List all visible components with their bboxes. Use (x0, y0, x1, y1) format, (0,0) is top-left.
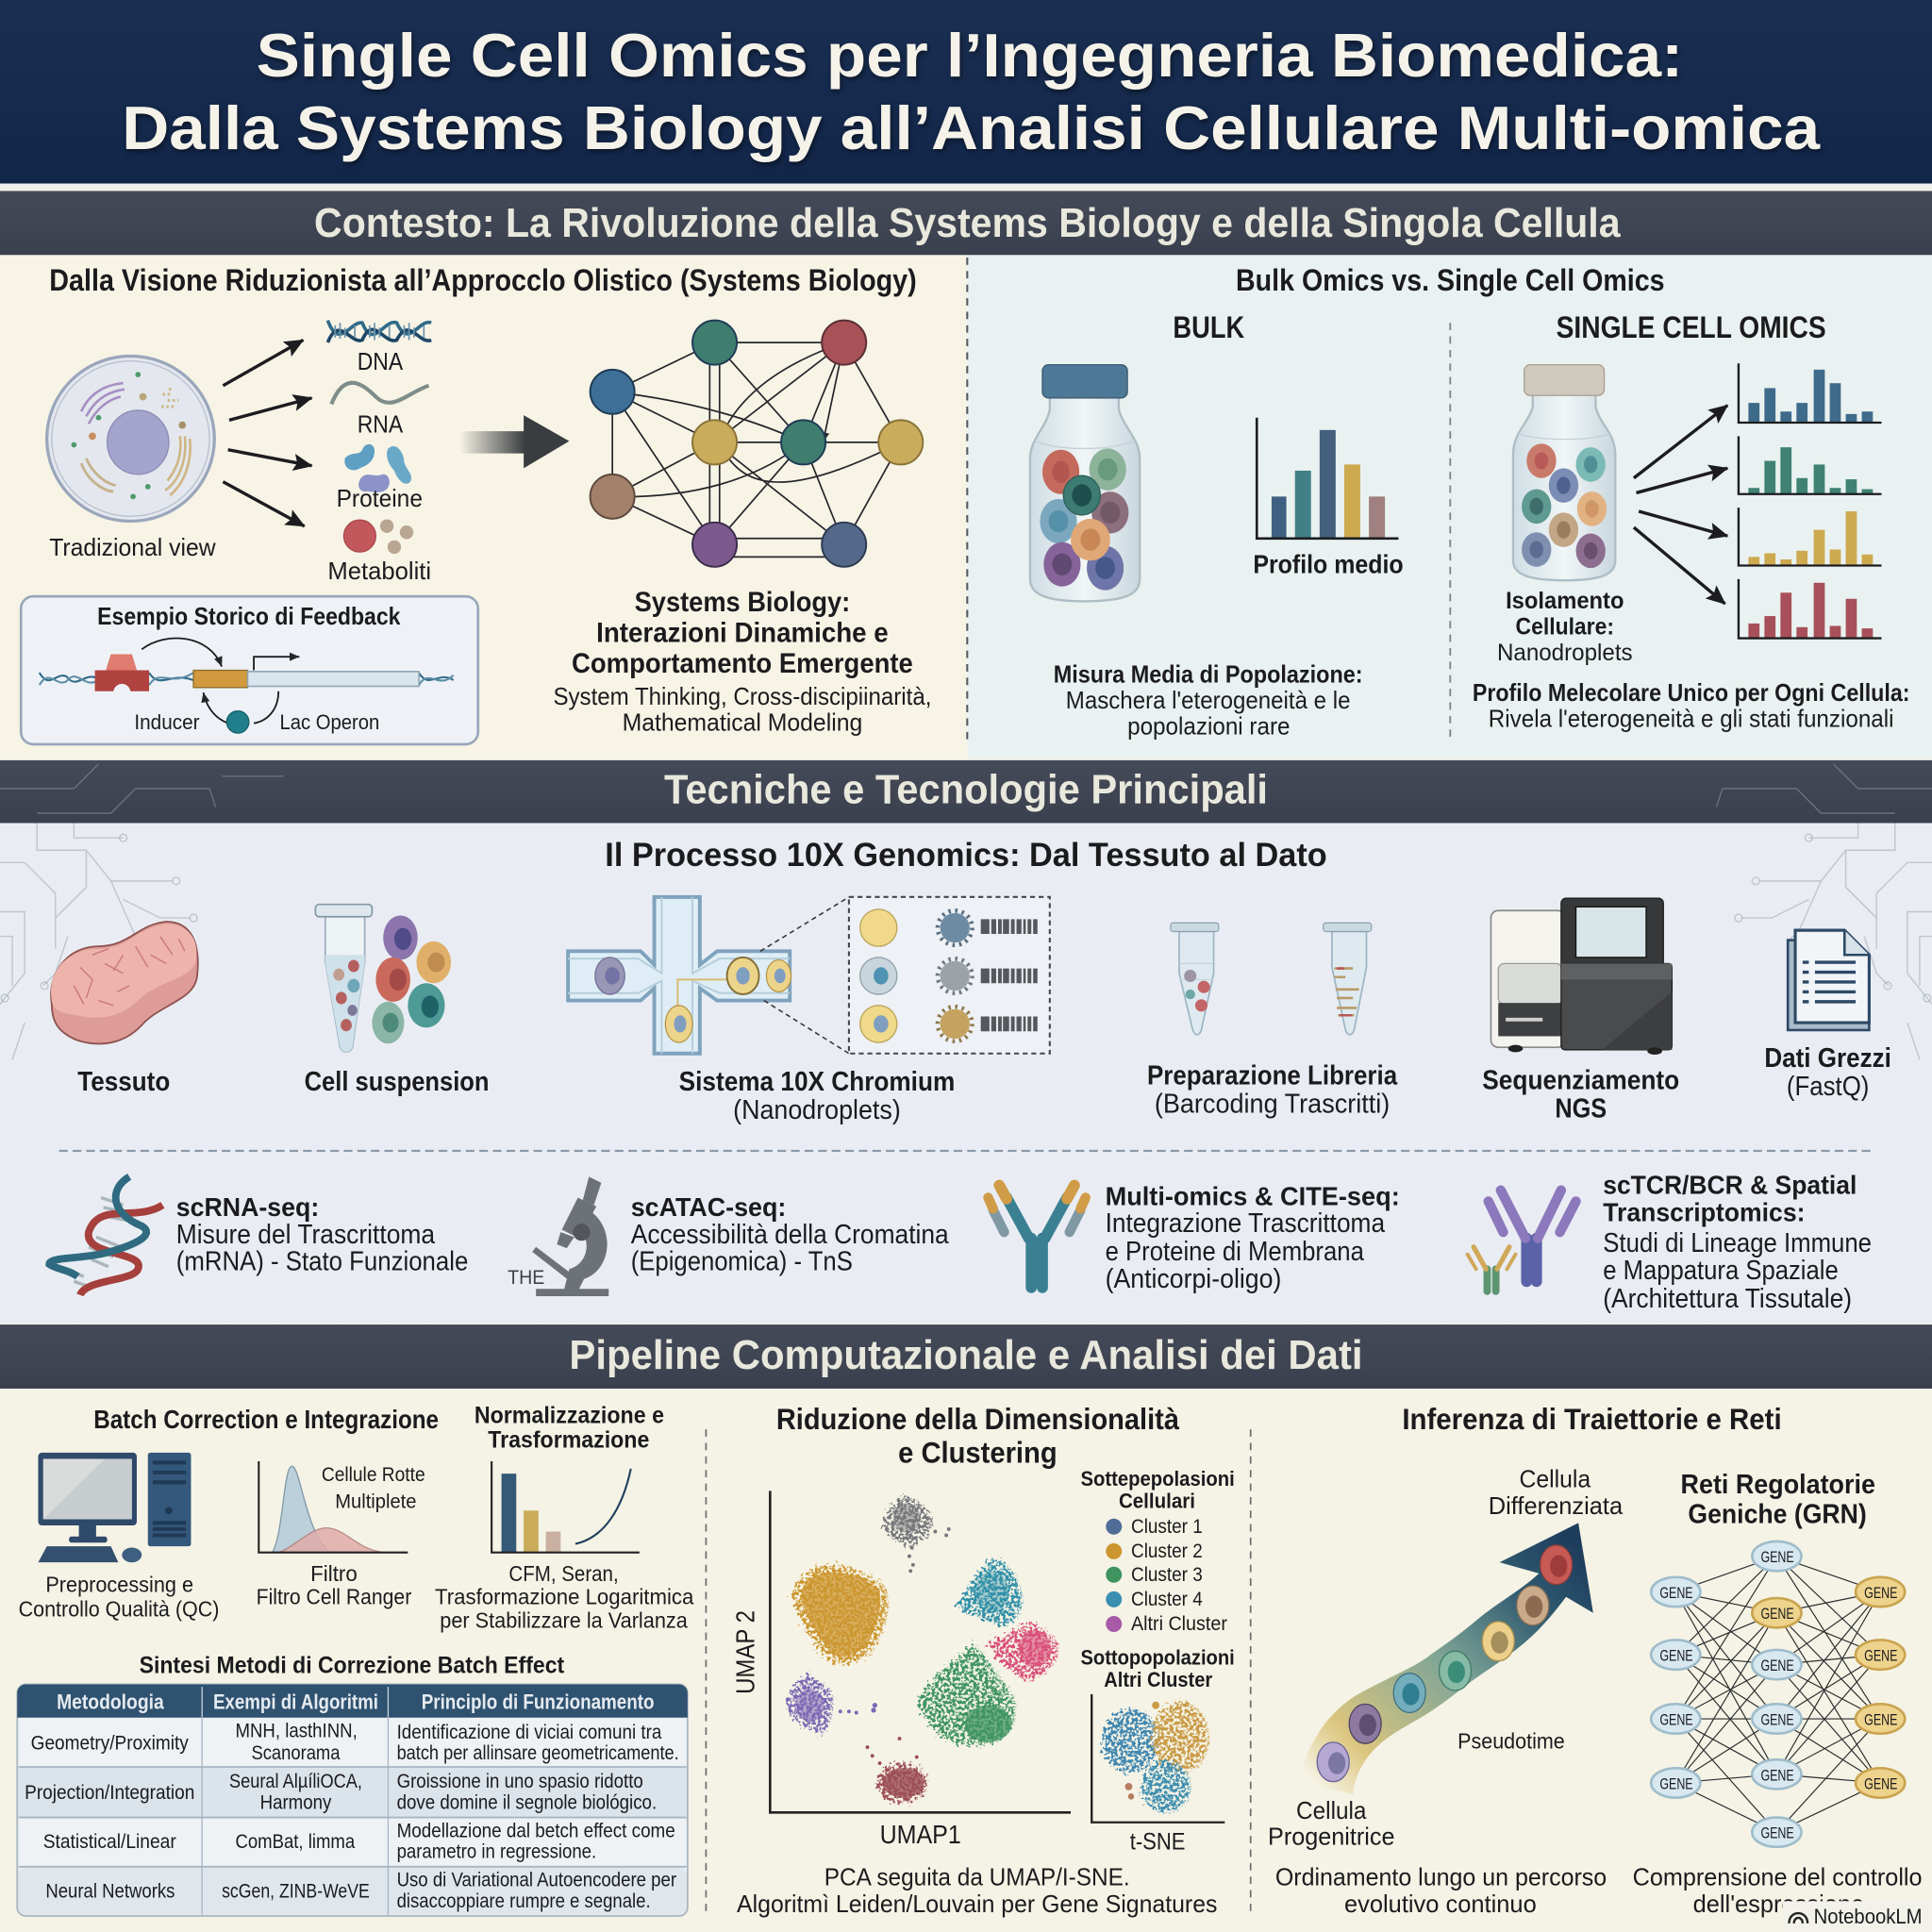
text block: systems biology: Interazioni Dinamiche e (596, 617, 889, 648)
text block: scatac-seq: Accessibilità della Cromatina (631, 1220, 949, 1250)
text block: normalization methods (435, 1561, 694, 1632)
section band: pipeline: Pipeline Computazionale e Analisi dei Dati (569, 1333, 1363, 1378)
text block: preprocessing: Preprocessing e (45, 1573, 193, 1597)
heading: processo 10x: Il Processo 10X Genomics: Dal Tessuto al Dato (605, 837, 1327, 874)
icon: antibody citeseq (989, 1185, 1086, 1288)
axis label: umap 2: UMAP 2 (730, 1610, 759, 1694)
arrows: cell to molecular layers (223, 340, 311, 526)
cluster: green (918, 1643, 1017, 1745)
text block: profilo molecolare (1473, 678, 1909, 733)
subheading: bulk: BULK (1173, 309, 1245, 344)
label: sistema 10x chromium: Sistema 10X Chromium (679, 1067, 955, 1097)
label: cellula differenziata: Cellula (1519, 1464, 1591, 1492)
text block: normalization methods: per Stabilizzare la Varlanza (440, 1607, 689, 1632)
bar chart: profile 3 (1739, 508, 1881, 566)
label: tradizional view: Tradizional view (49, 533, 216, 561)
row: neural networks (45, 1870, 676, 1912)
icon: proteine (344, 444, 411, 492)
legend: sottopopolazioni cellulari: Cluster 4 (1131, 1589, 1203, 1610)
caption: comprensione controllo: Comprensione del controllo (1633, 1862, 1923, 1890)
panel: 10x genomics process (0, 823, 1932, 1324)
text block: filtro: Filtro (310, 1561, 358, 1586)
caption: pca umap (737, 1862, 1217, 1918)
icon: dna helix (49, 1176, 162, 1295)
icon: microscope (508, 1176, 608, 1296)
table rows (17, 1684, 688, 1916)
header banner with title: Dalla Systems Biology all’Analisi Cellulare Multi-omica (122, 93, 1821, 162)
bar chart: profile 4 (1739, 579, 1881, 639)
chart: qc filter distribution: Multiplete (335, 1491, 416, 1513)
arrows: jar to profiles (1634, 406, 1727, 604)
section band: contesto (0, 191, 1932, 255)
label: inducer: Inducer (134, 710, 200, 734)
label: profilo medio: Profilo medio (1253, 549, 1404, 578)
text block: misura media (1054, 660, 1363, 740)
text block: sctcr spatial: e Mappatura Spaziale (1603, 1256, 1839, 1286)
diagram: lac operon (40, 639, 454, 733)
heading: sottopopolazioni altri cluster: Altri Cluster (1104, 1668, 1213, 1691)
text block: systems biology: Comportamento Emergente (572, 648, 913, 679)
icon: dna (327, 321, 431, 342)
text block: isolamento: Nanodroplets (1497, 641, 1633, 666)
caption: comprensione controllo (1633, 1862, 1923, 1918)
label: cellula progenitrice: Progenitrice (1268, 1822, 1395, 1850)
heading: sintesi metodi: Sintesi Metodi di Correzione Batch Effect (140, 1654, 564, 1679)
section band: tecniche (0, 760, 1932, 823)
axis label: t-sne: t-SNE (1130, 1829, 1185, 1855)
text block: scatac-seq (631, 1192, 949, 1277)
heading: riduzione dimensionalita: Riduzione della Dimensionalità (776, 1403, 1179, 1436)
network: gene regulatory network: GENE (1864, 1647, 1897, 1665)
bar chart: profile 2 (1739, 436, 1881, 494)
header banner with title: Single Cell Omics per l’Ingegneria Biomedica: (257, 21, 1683, 90)
network: gene regulatory network: GENE (1659, 1711, 1693, 1729)
text block: multi-omics: e Proteine di Membrana (1106, 1237, 1364, 1267)
network: gene regulatory network: GENE (1864, 1584, 1897, 1602)
row: geometry proximity: batch per allinsare geometricamente. (397, 1742, 679, 1764)
label: cellula progenitrice: Cellula (1296, 1796, 1367, 1824)
table header (17, 1684, 688, 1718)
text block: sctcr spatial: Transcriptomics: (1603, 1197, 1805, 1226)
label: cell suspension: Cell suspension (305, 1067, 490, 1097)
axis label: umap 1: UMAP1 (880, 1820, 961, 1849)
label: pseudotime: Pseudotime (1457, 1728, 1565, 1753)
network diagram: systems biology (591, 321, 923, 567)
heading: normalizzazione: Normalizzazione e (475, 1404, 664, 1429)
row: geometry proximity: Scanorama (251, 1742, 341, 1764)
text block: normalization methods: CFM, Seran, (508, 1561, 619, 1586)
subheading: single cell omics: SINGLE CELL OMICS (1557, 309, 1826, 344)
network: gene regulatory network: GENE (1864, 1774, 1897, 1792)
panel: preprocessing and batch correction (0, 1389, 1932, 1932)
arrow: pseudotime trajectory (1299, 1523, 1593, 1794)
text block: filtro (257, 1561, 411, 1609)
text block: systems biology: Systems Biology: (635, 587, 850, 618)
label: preparazione libreria (1147, 1060, 1398, 1119)
text block: preprocessing (19, 1573, 219, 1622)
label: dna: DNA (358, 347, 404, 375)
text block: scrna-seq: scRNA-seq: (176, 1192, 319, 1222)
label: sequenziamento ngs: NGS (1555, 1094, 1607, 1124)
text block: sctcr spatial: Studi di Lineage Immune (1603, 1228, 1872, 1258)
text block: multi-omics (1106, 1181, 1400, 1294)
icon: sequencer (1491, 898, 1672, 1055)
row: projection integration: Harmony (260, 1791, 332, 1813)
chart: t-sne scatter (1091, 1694, 1224, 1823)
network: gene regulatory network: GENE (1659, 1774, 1693, 1792)
section band: contesto: Contesto: La Rivoluzione della Systems Biology e della Singola Cellula (314, 201, 1622, 246)
bar chart: profile 1 (1739, 363, 1881, 423)
label: tessuto: Tessuto (77, 1067, 170, 1097)
diagram: 10x chromium microfluidics (568, 897, 791, 1054)
icon: computer (38, 1453, 191, 1562)
cluster: gray (883, 1496, 951, 1573)
cluster: maroon (866, 1737, 929, 1803)
icon: traditional cell (47, 356, 214, 521)
label: preparazione libreria: Preparazione Libreria (1147, 1060, 1398, 1091)
label: cellula differenziata (1489, 1464, 1624, 1520)
network: gene regulatory network: GENE (1864, 1711, 1897, 1729)
label: dati grezzi (1764, 1043, 1891, 1102)
network: gene regulatory network: GENE (1760, 1766, 1794, 1784)
heading: batch correction: Batch Correction e Integrazione (93, 1405, 439, 1434)
header banner with title (0, 0, 1932, 189)
heading: riduzione dimensionalita: e Clustering (898, 1436, 1058, 1469)
chart: qc filter distribution (258, 1461, 425, 1553)
legend: sottopopolazioni cellulari: Cluster 1 (1131, 1516, 1203, 1538)
row: neural networks: scGen, ZINB-WeVE (222, 1880, 370, 1902)
heading: normalizzazione (475, 1404, 664, 1454)
network: gene regulatory network: GENE (1760, 1824, 1794, 1842)
label: cellula progenitrice (1268, 1796, 1395, 1850)
text block: misura media: Misura Media di Popolazione: (1054, 660, 1363, 689)
callout heading: Esempio Storico di Feedback (97, 602, 401, 630)
label: proteine: Proteine (337, 484, 423, 512)
chart: umap scatter (770, 1491, 1071, 1812)
cluster: teal (957, 1558, 1024, 1625)
heading: bulk vs single cell: Bulk Omics vs. Single Cell Omics (1236, 262, 1665, 297)
text block: filtro: Filtro Cell Ranger (257, 1585, 411, 1609)
row: projection integration: dove domine il segnole biológico. (397, 1791, 657, 1813)
chart: normalization (491, 1461, 640, 1553)
table header: Principlo di Funzionamento (422, 1690, 655, 1714)
text block: isolamento: Isolamento (1506, 589, 1624, 614)
text block: isolamento: Cellulare: (1516, 615, 1614, 641)
text block: profilo molecolare: Rivela l'eterogeneità e gli stati funzionali (1489, 705, 1894, 733)
icon: rna (331, 383, 429, 404)
network: gene regulatory network: GENE (1760, 1548, 1794, 1566)
text block: misura media: popolazioni rare (1127, 711, 1291, 740)
panel: riduzionista vs olistico (0, 255, 967, 759)
label: sequenziamento ngs: Sequenziamento (1482, 1066, 1679, 1096)
section band: pipeline (0, 1324, 1932, 1389)
heading: reti regolatorie geniche: Reti Regolatorie (1681, 1470, 1875, 1500)
text block: multi-omics: Multi-omics & CITE-seq: (1106, 1181, 1400, 1210)
text block: sctcr spatial: (Architettura Tissutale) (1603, 1284, 1852, 1314)
heading: inferenza traiettorie: Inferenza di Traiettorie e Reti (1402, 1403, 1782, 1436)
legend: sottopopolazioni cellulari: Altri Cluster (1131, 1613, 1227, 1635)
row: neural networks: Uso di Variational Autoencodere per (397, 1870, 676, 1891)
heading: riduzione dimensionalita (776, 1403, 1179, 1469)
row: geometry proximity (31, 1721, 679, 1764)
icon: cell suspension (315, 905, 451, 1052)
text block: normalization methods: Trasformazione Logaritmica (435, 1585, 694, 1609)
network: gene regulatory network: GENE (1659, 1647, 1693, 1665)
text block: systems biology (553, 587, 931, 737)
network: gene regulatory network: GENE (1760, 1711, 1794, 1729)
cluster: purple (787, 1674, 877, 1734)
row: projection integration: Seural AlµíliOCA, (229, 1771, 362, 1792)
caption: comprensione controllo: dell'espressione (1693, 1890, 1864, 1918)
label: dati grezzi: (FastQ) (1787, 1072, 1869, 1102)
text block: scatac-seq: scATAC-seq: (631, 1192, 786, 1222)
section band: tecniche: Tecniche e Tecnologie Principali (664, 768, 1268, 813)
caption: pca umap: PCA seguita da UMAP/I-SNE. (824, 1862, 1130, 1890)
icon: tessuto (51, 922, 198, 1043)
row: statistical linear: Modellazione dal betch effect come (397, 1820, 675, 1841)
cluster: pink (989, 1622, 1059, 1681)
heading: sottopopolazioni altri cluster: Sottopopolazioni (1080, 1646, 1235, 1670)
row: statistical linear: Statistical/Linear (43, 1831, 176, 1853)
row: neural networks: disaccoppiare rumpre e segnale. (397, 1890, 651, 1912)
row: statistical linear: ComBat, limma (235, 1831, 356, 1853)
panel: bulk vs single cell (967, 255, 1932, 759)
callout: esempio storico di feedback (21, 596, 478, 744)
icon: metaboliti (343, 520, 413, 554)
bar chart: profilo medio (1257, 418, 1398, 539)
legend: sottopopolazioni cellulari: Cluster 3 (1131, 1564, 1203, 1586)
network: gene regulatory network: GENE (1760, 1657, 1794, 1674)
text block: preprocessing: Controllo Qualità (QC) (19, 1597, 219, 1622)
legend: sottopopolazioni cellulari: Cluster 2 (1131, 1541, 1203, 1562)
text block: sctcr spatial (1603, 1171, 1872, 1314)
legend: sottopopolazioni cellulari: Cellulari (1119, 1490, 1195, 1513)
chart: qc filter distribution: Cellule Rotte (322, 1464, 425, 1486)
text block: multi-omics: Integrazione Trascrittoma (1106, 1208, 1385, 1239)
label: lac operon: Lac Operon (279, 710, 379, 734)
text block: scrna-seq (176, 1192, 468, 1277)
label: sistema 10x chromium: (Nanodroplets) (733, 1095, 901, 1125)
label: sequenziamento ngs (1482, 1066, 1679, 1124)
label: metaboliti: Metaboliti (327, 557, 431, 585)
icon: document (1788, 930, 1869, 1030)
row: geometry proximity: MNH, lasthINN, (235, 1721, 358, 1742)
heading: visione riduzionista: Dalla Visione Riduzionista all’Approcclo Olistico (Systems Biology) (49, 262, 917, 297)
text block: scrna-seq: Misure del Trascrittoma (176, 1220, 435, 1250)
label: rna: RNA (358, 409, 404, 438)
text block: scatac-seq: (Epigenomica) - TnS (631, 1247, 853, 1277)
network: gene regulatory network: GENE (1659, 1584, 1693, 1602)
icon: tcr bcr antibodies (1468, 1191, 1576, 1291)
text block: systems biology: System Thinking, Cross-discipiinarità, (553, 682, 931, 710)
row: projection integration: Projection/Integration (25, 1782, 194, 1804)
row: statistical linear (43, 1820, 675, 1863)
text block: multi-omics: (Anticorpi-oligo) (1106, 1264, 1281, 1294)
text block: sctcr spatial: scTCR/BCR & Spatial (1603, 1171, 1857, 1200)
row: projection integration: Groissione in uno spasio ridotto (397, 1771, 643, 1792)
icon: library tubes (1171, 923, 1372, 1035)
label: dati grezzi: Dati Grezzi (1764, 1043, 1891, 1074)
text block: isolamento (1497, 589, 1633, 666)
label: preparazione libreria: (Barcoding Trascritti) (1155, 1089, 1390, 1119)
legend: sottopopolazioni cellulari (1080, 1467, 1235, 1635)
table: batch correction methods (17, 1684, 688, 1916)
label: sistema 10x chromium (679, 1067, 955, 1125)
heading: reti regolatorie geniche (1681, 1470, 1875, 1529)
icon: microscope: THE (508, 1267, 544, 1289)
text block: scrna-seq: (mRNA) - Stato Funzionale (176, 1247, 468, 1277)
caption: pca umap: Algoritmì Leiden/Louvain per Gene Signatures (737, 1890, 1217, 1918)
legend: sottopopolazioni cellulari: Sottepepolasioni (1080, 1467, 1235, 1491)
caption: ordinamento: Ordinamento lungo un percorso (1275, 1862, 1607, 1890)
network: gene regulatory network: GENE (1760, 1605, 1794, 1623)
table header: Exempi di Algoritmi (213, 1690, 378, 1714)
arrow: reductionist to holistic (459, 415, 569, 468)
row: statistical linear: parametro in regressione. (397, 1841, 596, 1863)
badge: notebooklm: NotebookLM (1814, 1905, 1923, 1928)
badge: notebooklm (1783, 1901, 1932, 1932)
network: gene regulatory network (1651, 1541, 1905, 1847)
heading: sottopopolazioni altri cluster (1080, 1646, 1235, 1691)
label: cellula differenziata: Differenziata (1489, 1491, 1624, 1520)
row: geometry proximity: Identificazione di viciai comuni tra (397, 1722, 662, 1743)
table header: Metodologia (57, 1690, 164, 1714)
cluster: gold (793, 1565, 889, 1664)
caption: ordinamento (1275, 1862, 1607, 1918)
row: projection integration (25, 1771, 657, 1813)
heading: normalizzazione: Trasformazione (488, 1428, 649, 1454)
text block: misura media: Maschera l'eterogeneità e le (1066, 686, 1351, 714)
caption: ordinamento: evolutivo continuo (1344, 1890, 1537, 1918)
callout: droplet detail (760, 897, 1050, 1054)
row: geometry proximity: Geometry/Proximity (31, 1733, 189, 1755)
icon: bulk jar (1030, 365, 1140, 601)
text block: systems biology: Mathematical Modeling (623, 708, 862, 737)
row: neural networks: Neural Networks (45, 1880, 175, 1902)
icon: single cell jar (1513, 365, 1615, 580)
heading: reti regolatorie geniche: Geniche (GRN) (1688, 1499, 1867, 1529)
